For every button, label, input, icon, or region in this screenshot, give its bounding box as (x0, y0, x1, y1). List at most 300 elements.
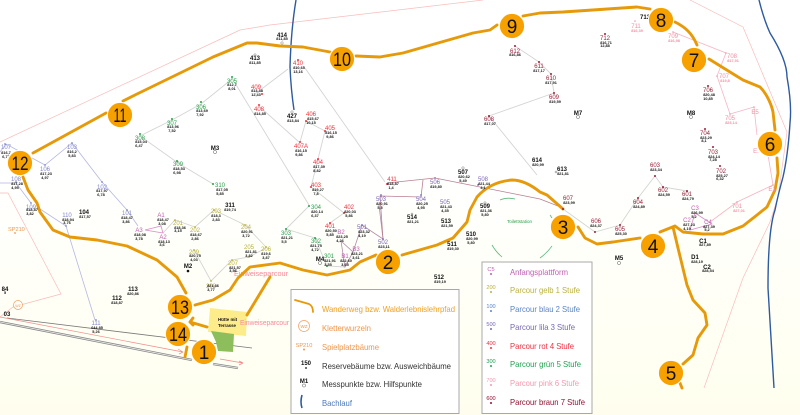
legend row: Parcour rot: 400 (486, 341, 496, 347)
reserve trees: black labels left: 820,86 (127, 292, 139, 296)
green course 3xx: 306 (196, 105, 207, 111)
reserve trees: black labels centre (407, 15, 715, 284)
reserve trees: black labels left: 414 (277, 33, 288, 39)
yellow course 2xx: 206 (261, 247, 272, 253)
legend row: Kletterwurzeln: WZ (300, 324, 308, 329)
red course 4xx: 1,4 (388, 186, 395, 190)
brown course 6xx: 611 (534, 64, 544, 70)
legend row: Parcour pink (486, 378, 579, 388)
green course 3xx: 821,91 (324, 259, 336, 263)
tree nodes: blue course 1xx: 4,97 (41, 176, 49, 180)
purple course 5xx: 823,11 (378, 245, 390, 249)
purple and brown course lines (341, 178, 563, 267)
measuring points M: M4 (316, 257, 325, 263)
number marker 2 (375, 249, 401, 275)
number marker 12 (7, 150, 33, 176)
start platform nodes A and C (134, 206, 715, 247)
legend row: Parcour pink: Parcour pink 6 Stufe (510, 379, 579, 388)
red course 4xx: 409 (251, 85, 262, 91)
number marker 5 (658, 360, 684, 386)
red course 4xx: 403 (311, 183, 322, 189)
brown course 6xx: 825,27 (716, 174, 728, 178)
reserve trees: black labels centre: 713 (640, 15, 651, 21)
brown course 6xx: 8,1 (701, 139, 707, 143)
green course 3xx: 6,47 (135, 144, 143, 148)
legend row: Parcour gelb: 200 (486, 285, 496, 291)
yellow course 2xx: 207 (228, 261, 239, 267)
red course 4xx: 5,86 (345, 214, 353, 218)
brown course 6xx: 823,29 (700, 136, 712, 140)
green course 3xx: 6,37 (311, 214, 319, 218)
red course 4xx: 817,39 (313, 165, 325, 169)
measuring points M: M7 (574, 111, 583, 117)
red course 4xx: 820,03 (344, 210, 356, 214)
purple course 5xx: 4,1 (480, 186, 486, 190)
measuring points M: M3 (211, 146, 220, 152)
start platform nodes A and C: 827,23 (683, 223, 695, 227)
red course 4xx: 5,85 (326, 233, 334, 237)
number marker 13 (167, 294, 193, 320)
start platform nodes A and C: 3,6 (159, 243, 165, 247)
brown course 6xx: 607 (563, 196, 574, 202)
red course 4xx: 810,65 (293, 66, 305, 70)
number marker 6: 6 (765, 135, 775, 156)
red course 4xx: 9,86 (326, 135, 334, 139)
yellow course 2xx: 209 (189, 250, 200, 256)
yellow course 2xx: 204 (241, 225, 252, 231)
tree nodes: blue course 1xx: 102 (97, 185, 108, 191)
tree nodes: blue course 1xx: 817,97 (96, 189, 108, 193)
reserve trees: black labels left: 811,85 (276, 37, 288, 41)
start platform nodes A and C: 818,13 (158, 240, 170, 244)
tree nodes: blue course 1xx: 817,23 (40, 172, 52, 176)
yellow course 2xx: 3,72 (242, 234, 250, 238)
start platform nodes A and C: C3 (691, 206, 699, 212)
hut with terrace: Terrasse (218, 323, 237, 328)
tree nodes: blue course 1xx: 644,85 (91, 326, 103, 330)
reserve trees: black labels left (2, 33, 300, 318)
blue course lines (0, 143, 138, 320)
brown course 6xx: 816,71 (600, 41, 612, 45)
reserve trees: black labels centre: 5,49 (459, 179, 467, 183)
brown course 6xx: 816,86 (509, 53, 521, 57)
tree nodes: blue course 1xx: 111 (91, 321, 101, 327)
red course 4xx: 13,16 (293, 70, 303, 74)
number marker 10: 10 (333, 50, 351, 71)
green course 3xx (135, 76, 336, 267)
reserve trees: black labels left: 818,87 (111, 301, 123, 305)
start platform nodes A and C: 826,99 (691, 211, 703, 215)
red course 4xx: 406 (306, 112, 317, 118)
reserve trees: black labels centre: C2 (703, 265, 711, 271)
green course 3xx: 817,05 (216, 188, 228, 192)
green course 3xx: 821,21 (281, 236, 293, 240)
magenta and purple B nodes: B3 (352, 247, 360, 253)
brown course 6xx: 824,14 (708, 155, 721, 159)
legend row: Anfangsplattform (487, 267, 568, 277)
pink course 7xx: 827,01 (733, 209, 745, 213)
legend row: Wanderweg: Wanderweg bzw. Walderlebnislehrpfad (322, 305, 455, 314)
red course 4xx: 818,87 (387, 182, 399, 186)
legend row: Parcour blau: Parcour blau 2 Stufe (510, 305, 580, 314)
green toilet station dashed circle (492, 198, 552, 258)
brown course 6xx: 602 (658, 188, 669, 194)
reserve trees: black labels centre: 821,36 (480, 209, 492, 213)
reserve trees: black labels centre: 514 (407, 215, 418, 221)
purple course 5xx: 503 (376, 197, 387, 203)
legend row: Spielplatzbäume: Spielplatzbäume (322, 343, 379, 352)
brown course 6xx: 823,34 (650, 168, 663, 172)
red course 4xx: 9,86 (295, 153, 303, 157)
number marker 14: 14 (169, 325, 187, 346)
Einweiseparcour labels (234, 271, 290, 327)
pink course lines (673, 32, 773, 222)
reserve trees: black labels centre: 820,99 (466, 237, 478, 241)
reserve trees: black labels left: 817,57 (79, 215, 91, 219)
tree nodes: blue course 1xx: 6,77 (2, 155, 10, 159)
number marker 11 (107, 102, 133, 128)
yellow course 2xx: 3,87 (262, 256, 270, 260)
measuring points M: M5 (615, 256, 624, 262)
tree nodes: blue course 1xx: 109 (26, 205, 37, 211)
road and path lines (0, 317, 252, 368)
toilet station label: Toilettstation (507, 219, 532, 224)
purple course 5xx: 5,5 (377, 206, 383, 210)
playground tree and climbing roots: SP210 (8, 227, 25, 233)
yellow course 2xx: 203 (211, 209, 222, 215)
yellow course 2xx: 4,03 (190, 258, 198, 262)
brown course 6xx: 824,59 (658, 193, 670, 197)
green course 3xx: 813,96 (167, 125, 179, 129)
yellow course 2xx: 3,56 (229, 269, 237, 273)
green course 3xx: 307 (167, 121, 178, 127)
reserve trees: black labels centre: 821,21 (407, 220, 419, 224)
tree nodes: blue course 1xx: 110 (62, 213, 72, 219)
brown course 6xx (484, 33, 728, 236)
reserve trees: black labels centre: 828,54 (702, 269, 715, 273)
brown course 6xx: 817,91 (545, 81, 557, 85)
legend row: Anfangsplattform: Anfangsplattform (510, 268, 568, 277)
legend row: Parcour blau (486, 304, 580, 314)
reserve trees: black labels left: 5 (4, 291, 6, 295)
number marker 7: 7 (689, 51, 699, 72)
red course 4xx: 405 (325, 126, 336, 132)
yellow course 2xx: 820,91 (241, 230, 253, 234)
measuring points M: M2 (184, 264, 193, 270)
purple course 5xx: 820,25 (416, 202, 428, 206)
number marker 13: 13 (171, 298, 189, 319)
brown course 6xx: 824,79 (682, 197, 694, 201)
legend panel: parcours (482, 262, 592, 414)
red course 4xx: 814,85 (254, 112, 266, 116)
brown course 6xx: 712 (600, 36, 611, 42)
purple course 5xx: 504 (416, 197, 427, 203)
brown course 6xx: 10,85 (703, 97, 713, 101)
number marker 5: 5 (666, 364, 676, 385)
Einweiseparcour labels: Einweiseparcour (240, 320, 290, 327)
purple course 5xx: 501 (357, 225, 368, 231)
pink course 7xx: 819,8 (720, 79, 730, 83)
purple course 5xx: 819,80 (430, 185, 442, 189)
green course 3xx: 4,72 (311, 248, 319, 252)
red course 4xx: 813,38 (251, 89, 263, 93)
brown course 6xx: 704 (700, 131, 711, 137)
tree nodes: blue course 1xx: 818,47 (121, 216, 133, 220)
red course 4xx (251, 59, 399, 237)
legend row: Parcour gelb (486, 285, 580, 295)
tree nodes: blue course 1xx: 818,94 (62, 218, 75, 222)
yellow course 2xx: 820,75 (189, 254, 201, 258)
magenta and purple B nodes: B1 (341, 254, 349, 260)
legend row: Parcour rot: Parcour rot 4 Stufe (510, 342, 574, 351)
brown course 6xx: 7,28 (709, 158, 717, 162)
playground tree and climbing roots (8, 227, 25, 310)
number marker 4: 4 (648, 237, 659, 258)
hut with terrace (208, 308, 247, 352)
red course 4xx: 402 (344, 205, 355, 211)
magenta and purple B nodes: B2 (337, 230, 345, 236)
tree nodes: blue course 1xx: 816,2 (67, 150, 77, 154)
number marker 3 (550, 214, 576, 240)
brown course 6xx: 612 (510, 49, 521, 55)
magenta and purple B nodes: 4,26 (336, 239, 344, 243)
green course 3xx: 5,85 (216, 192, 224, 196)
brown course 6xx: 610 (546, 76, 557, 82)
green course 3xx: 818,53 (173, 167, 185, 171)
pink course 7xx: E. (753, 149, 759, 155)
reserve trees: black labels centre: 827,89 (699, 243, 711, 247)
number marker 7 (681, 47, 707, 73)
purple course 5xx: 4,95 (417, 206, 425, 210)
legend row: Parcour lila: 500 (486, 322, 496, 328)
start platform nodes A and C: A3 (135, 228, 143, 234)
reserve trees: black labels centre: 820,99 (532, 163, 544, 167)
number marker 8 (648, 7, 674, 33)
magenta start platform triangles (145, 213, 712, 233)
green course 3xx: 8,01 (228, 87, 236, 91)
purple course 5xx: 505 (440, 200, 451, 206)
reserve trees: black labels left: 84 (2, 287, 9, 293)
brown course 6xx: 608 (484, 117, 495, 123)
legend row: Spielplatzbäume (296, 343, 379, 352)
legend row: Reservebäume: 150 (301, 361, 312, 367)
reserve trees: black labels left: 311 (225, 203, 235, 209)
legend row: Parcour lila (486, 322, 575, 332)
magenta and purple B nodes: 823,25 (336, 235, 348, 239)
tree nodes: blue course 1xx: 107 (1, 145, 12, 151)
red course 4xx: 816,15 (295, 149, 307, 153)
pink course 7xx: 701 (732, 204, 743, 210)
green course 3xx: 813,69 (196, 109, 208, 113)
green course 3xx: 305 (227, 79, 238, 85)
legend row: Reservebäume: Reservebäume bzw. Ausweichbäume (322, 362, 451, 371)
yellow course 2xx: 2,83 (212, 218, 220, 222)
reserve trees: black labels left: 413 (250, 56, 261, 62)
start platform nodes A and C: 3,08 (158, 222, 166, 226)
yellow course 2xx: 819,6 (261, 252, 271, 256)
legend row: Messpunkte: Messpunkte bzw. Hilfspunkte (322, 380, 422, 389)
yellow course 2xx: 202 (190, 228, 201, 234)
brown course 6xx: 606 (591, 219, 602, 225)
reserve trees: black labels centre: 510 (466, 232, 477, 238)
reserve trees: black labels centre: 819,30 (447, 247, 459, 251)
reserve trees: black labels centre: 821,59 (441, 224, 453, 228)
reserve trees: black labels centre: D1 (691, 255, 699, 261)
tree nodes: blue course 1xx: 103 (67, 145, 78, 151)
number marker 12: 12 (12, 154, 28, 175)
red course 4xx: 404 (313, 160, 324, 166)
purple course 5xx: 821,43 (440, 205, 452, 209)
green course 3xx: 5,5 (281, 240, 287, 244)
playground tree and climbing roots: WZ (15, 304, 22, 308)
brown course 6xx: 824,89 (633, 205, 645, 209)
tree nodes: blue course 1xx: 816,7 (1, 151, 11, 155)
purple course 5xx: 4,19 (358, 234, 366, 238)
legend row: Parcour grün: 300 (486, 359, 496, 365)
purple course 5xx: 502 (378, 240, 389, 246)
brown course 6xx: 820,48 (703, 93, 715, 97)
red course 4xx: 411 (387, 177, 397, 183)
brown course 6xx: 603 (650, 163, 661, 169)
tree nodes: blue course 1xx: 5,26 (92, 330, 100, 334)
legend row: Kletterwurzeln: Kletterwurzeln (322, 324, 371, 333)
yellow course 2xx: 3,82 (245, 254, 253, 258)
yellow course 2xx: 3,15 (174, 229, 182, 233)
tree nodes: blue course 1xx: 5,83 (68, 154, 76, 158)
number marker 2: 2 (383, 253, 393, 274)
green course 3xx: 821,75 (310, 244, 322, 248)
legend row: Parcour grün (486, 359, 581, 369)
legend row: Parcour grün: Parcour grün 5 Stufe (510, 360, 581, 369)
reserve trees: black labels left: 811,85 (249, 61, 261, 65)
brown course 6xx: 12,88 (600, 44, 610, 48)
red course 4xx: 410 (293, 61, 304, 67)
brown course 6xx: 817,17 (533, 69, 545, 73)
green course 3xx: 308 (135, 136, 146, 142)
measuring points M (184, 111, 696, 272)
pink course 7xx: 707 (719, 74, 730, 80)
start platform nodes A and C: 5,2 (691, 215, 697, 219)
legend row: Parcour lila: Parcour lila 3 Stufe (510, 323, 575, 332)
red course 4xx: 820,50 (325, 229, 337, 233)
yellow course 2xx: 208 (206, 284, 217, 290)
brown course 6xx: 6,32 (716, 177, 724, 181)
brown course 6xx: 605 (615, 227, 626, 233)
reserve trees: black labels left: 427 (287, 114, 298, 120)
brown course 6xx: 823,99 (563, 201, 575, 205)
reserve trees: black labels left: 104 (79, 210, 90, 216)
reserve trees: black labels centre: 614 (532, 158, 543, 164)
reserve trees: black labels left: 813,84 (287, 119, 300, 123)
legend row: Wanderweg (295, 300, 455, 314)
green course 3xx: 301 (324, 254, 335, 260)
number marker 1 (191, 339, 217, 365)
magenta and purple B nodes (336, 230, 363, 267)
hut with terrace: Hütte mit (218, 317, 238, 322)
pink course 7xx: 817,91 (727, 59, 739, 63)
yellow course 2xx: 818,36 (174, 226, 186, 230)
red course 4xx: 10,15 (306, 121, 316, 125)
green course 3xx: 7,52 (168, 129, 176, 133)
number marker 11: 11 (114, 106, 126, 127)
magenta and purple B nodes: 3,65 (341, 263, 349, 267)
red course 4xx: 407A (294, 144, 308, 150)
pink course 7xx: E5 (751, 110, 759, 116)
legend row: Parcour blau: 100 (486, 304, 496, 310)
reserve trees: black labels centre: 512 (434, 275, 445, 281)
brown course 6xx: 819,59 (549, 100, 561, 104)
red course 4xx: 7,8 (313, 192, 319, 196)
yellow course 2xx: 205 (244, 245, 255, 251)
magenta and purple B nodes: 823,21 (351, 252, 363, 256)
reserve trees: black labels centre: 513 (441, 219, 452, 225)
start platform nodes A and C: C4 (704, 220, 712, 226)
legend panel: route symbols (291, 290, 459, 414)
reserve trees: black labels centre: 828,19 (691, 260, 703, 264)
brown course 6xx: 706 (703, 88, 714, 94)
red course 4xx: 408 (254, 107, 265, 113)
reserve trees: black labels centre: 5,80 (481, 213, 489, 217)
stream left (290, 0, 296, 110)
number marker 6 (757, 131, 783, 157)
number marker 1: 1 (199, 343, 209, 364)
pink course 7xx: 816,98 (668, 39, 680, 43)
stream right (759, 0, 791, 388)
measuring points M: M8 (687, 111, 696, 117)
reserve trees: black labels centre: 5,80 (467, 241, 475, 245)
pink course 7xx: 705 (725, 116, 736, 122)
red course 4xx: 401 (325, 224, 336, 230)
yellow course 2xx: 821,57 (229, 266, 241, 270)
yellow course 2xx: 2,86 (191, 237, 199, 241)
purple course 5xx: 823,32 (358, 230, 370, 234)
tree nodes: blue course 1xx: 3,82 (26, 212, 34, 216)
number marker 8: 8 (656, 11, 666, 32)
reserve trees: black labels centre: 820,62 (458, 175, 470, 179)
reserve trees: black labels left: 03 (4, 312, 11, 318)
pink course 7xx: 816,39 (631, 29, 643, 33)
start platform nodes A and C: A2 (159, 235, 167, 241)
tree nodes: blue course 1xx: 4,95 (11, 186, 19, 190)
green course 3xx: 310 (215, 183, 226, 189)
purple course 5xx: 820,91 (376, 202, 388, 206)
legend row: Parcour braun: Parcour braun 7 Stufe (510, 398, 585, 407)
tree nodes: blue course 1xx: 818,87 (26, 208, 38, 212)
green course 3xx: 812,7 (227, 83, 237, 87)
legend row: Kletterwurzeln (298, 320, 371, 333)
legend row: Bachlauf: Bachlauf (322, 399, 353, 408)
legend row: Spielplatzbäume: SP210 (296, 343, 312, 349)
purple course 5xx: 4,35 (441, 209, 449, 213)
number marker 9 (499, 13, 525, 39)
start platform nodes A and C: 818,47 (157, 218, 169, 222)
red course 4xx: 12,43 (251, 93, 261, 97)
tree nodes: blue course 1xx: 106 (40, 167, 51, 173)
yellow course 2xx: 818,3 (211, 214, 221, 218)
purple course 5xx: 508 (478, 177, 489, 183)
pink course 7xx: 708 (727, 54, 738, 60)
reserve trees: black labels left: 112 (112, 296, 122, 302)
tree nodes: blue course 1xx: 817,28 (11, 182, 23, 186)
reserve trees: black labels left: 819,74 (224, 208, 237, 212)
yellow course 2xx: 818,67 (190, 233, 202, 237)
reserve trees: black labels centre: 509 (480, 204, 491, 210)
yellow course 2xx: 821,81 (245, 250, 257, 254)
brown course 6xx: 601 (682, 192, 693, 198)
magenta and purple B nodes: 3,61 (352, 256, 360, 260)
legend row: Parcour rot (486, 341, 574, 351)
pink course 7xx: E1 (768, 187, 776, 193)
